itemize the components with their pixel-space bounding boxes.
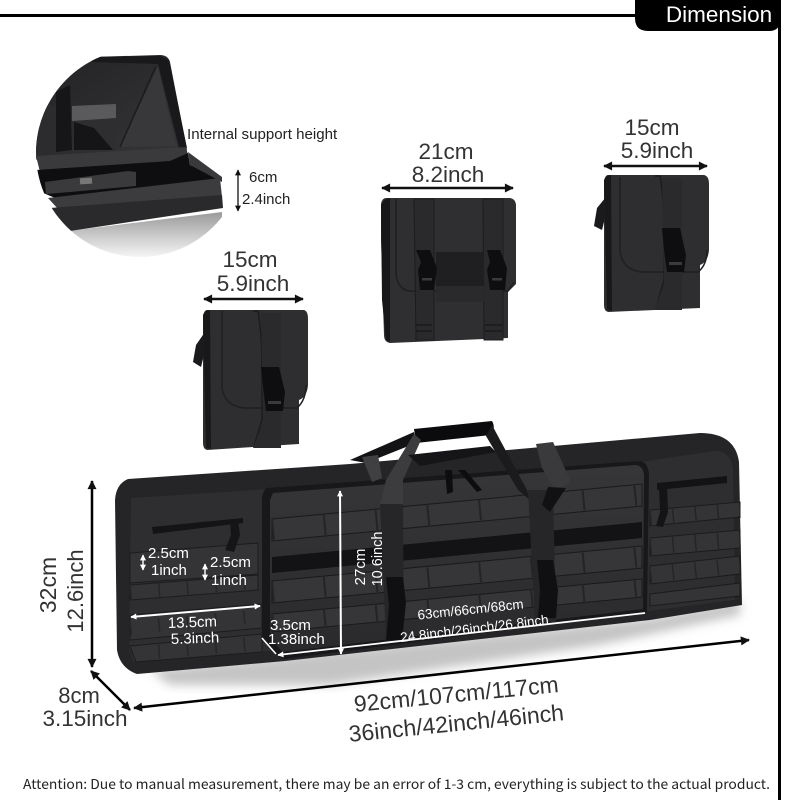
left MOLLE rows: [130, 543, 262, 662]
arrow: internal height: [237, 170, 239, 211]
arrow: small pouch left width: [204, 298, 303, 300]
small pouch label right: 15cm: [624, 115, 680, 140]
white dimension labels: 63cm/66cm/68cm: [417, 596, 524, 623]
attention note: Attention: Due to manual measurement, there may be an error of 1-3 cm, everything is subject to the actual product.: [23, 773, 770, 793]
webbing gap arrow left: [142, 555, 144, 570]
white dimension labels: 3.5cm: [270, 617, 311, 634]
label: bag height: [35, 549, 88, 633]
front pocket stitches: [272, 495, 642, 623]
label: bag height: 12.6inch: [63, 549, 88, 633]
label: bag depth: [42, 683, 128, 731]
strap left: [380, 434, 421, 504]
white dimension arrows: [131, 491, 645, 655]
right buckle: [487, 250, 507, 290]
heading tab: Dimension: Dimension: [666, 2, 772, 27]
white dimension labels: 2.5cm: [210, 554, 251, 571]
top carry handle: [350, 432, 416, 463]
label: 6cm 2.4inch: 6cm: [249, 169, 277, 186]
webbing gap arrow right: [204, 564, 206, 580]
strap right: [528, 490, 556, 622]
small pouch label left: 15cm: [222, 247, 278, 272]
right side pocket MOLLE: [650, 502, 740, 606]
label: large pouch width: 8.2inch: [412, 162, 484, 187]
label: 6cm 2.4inch: 2.4inch: [242, 191, 290, 208]
white dimension labels: 1inch: [211, 572, 247, 589]
inset photo: internal support: [36, 55, 223, 257]
white dimension labels: 10.6inch: [370, 532, 386, 586]
white dimension labels: 27cm: [352, 549, 369, 585]
white dimension labels: 1inch: [151, 562, 187, 579]
arrow: large pouch width: [382, 187, 513, 189]
white dimension labels: 2.5cm: [148, 545, 189, 562]
side pocket width arrow: [131, 606, 260, 617]
velcro band: [272, 522, 642, 573]
label: large pouch width: 21cm: [418, 139, 474, 164]
white dimension labels: [148, 532, 549, 648]
arrow: bag depth: [91, 671, 130, 710]
label: bag depth: 3.15inch: [42, 706, 128, 731]
bag shadow: [150, 600, 740, 685]
left buckle: [416, 250, 437, 290]
front pocket: [262, 461, 649, 659]
arrow: bag length: [134, 640, 749, 708]
heading tab: Dimension: [635, 0, 780, 31]
small pouch label right: [621, 115, 693, 163]
connector loops: [362, 455, 382, 482]
right MOLLE stitches: [650, 510, 740, 575]
main gun bag: [115, 421, 742, 674]
white dimension labels: 24.8inch/26inch/26.8inch: [399, 612, 549, 645]
arrow: small pouch right width: [604, 165, 707, 167]
label: internal support height: Internal support height: [187, 126, 338, 143]
pocket depth arrow: [262, 638, 276, 654]
small pouch right: [594, 175, 709, 312]
white dimension labels: 1.38inch: [268, 631, 325, 648]
small pouch label right: 5.9inch: [621, 138, 693, 163]
label: large pouch width: [412, 139, 484, 187]
small pouch label left: 5.9inch: [217, 271, 289, 296]
small pouch label left: [217, 247, 289, 296]
top zipper pulls: [445, 470, 482, 494]
bag body: [115, 433, 742, 674]
large pouch: [381, 198, 516, 343]
top border line: [0, 14, 640, 17]
label: bag length: [347, 671, 565, 747]
white dimension labels: 5.3inch: [171, 629, 219, 648]
label: bag depth: 8cm: [58, 683, 100, 708]
white dimension labels: 13.5cm: [168, 613, 217, 632]
label: bag length: 92cm/107cm/117cm: [353, 671, 560, 717]
front pocket MOLLE rows: [272, 484, 642, 632]
arrow: bag height: [91, 481, 93, 667]
small pouch left: [193, 310, 308, 450]
label: bag height: 32cm: [35, 557, 61, 613]
front pocket length arrow: [278, 613, 645, 655]
right zipper: [657, 476, 727, 490]
right buckle: [537, 560, 558, 618]
left MOLLE stitches: [130, 582, 262, 654]
left zipper: [152, 518, 243, 534]
right border line: [778, 0, 781, 800]
label: bag length: 36inch/42inch/46inch: [347, 699, 565, 747]
label: 6cm 2.4inch: [242, 169, 290, 208]
pocket height arrow: [340, 491, 341, 654]
left buckle: [386, 577, 406, 640]
